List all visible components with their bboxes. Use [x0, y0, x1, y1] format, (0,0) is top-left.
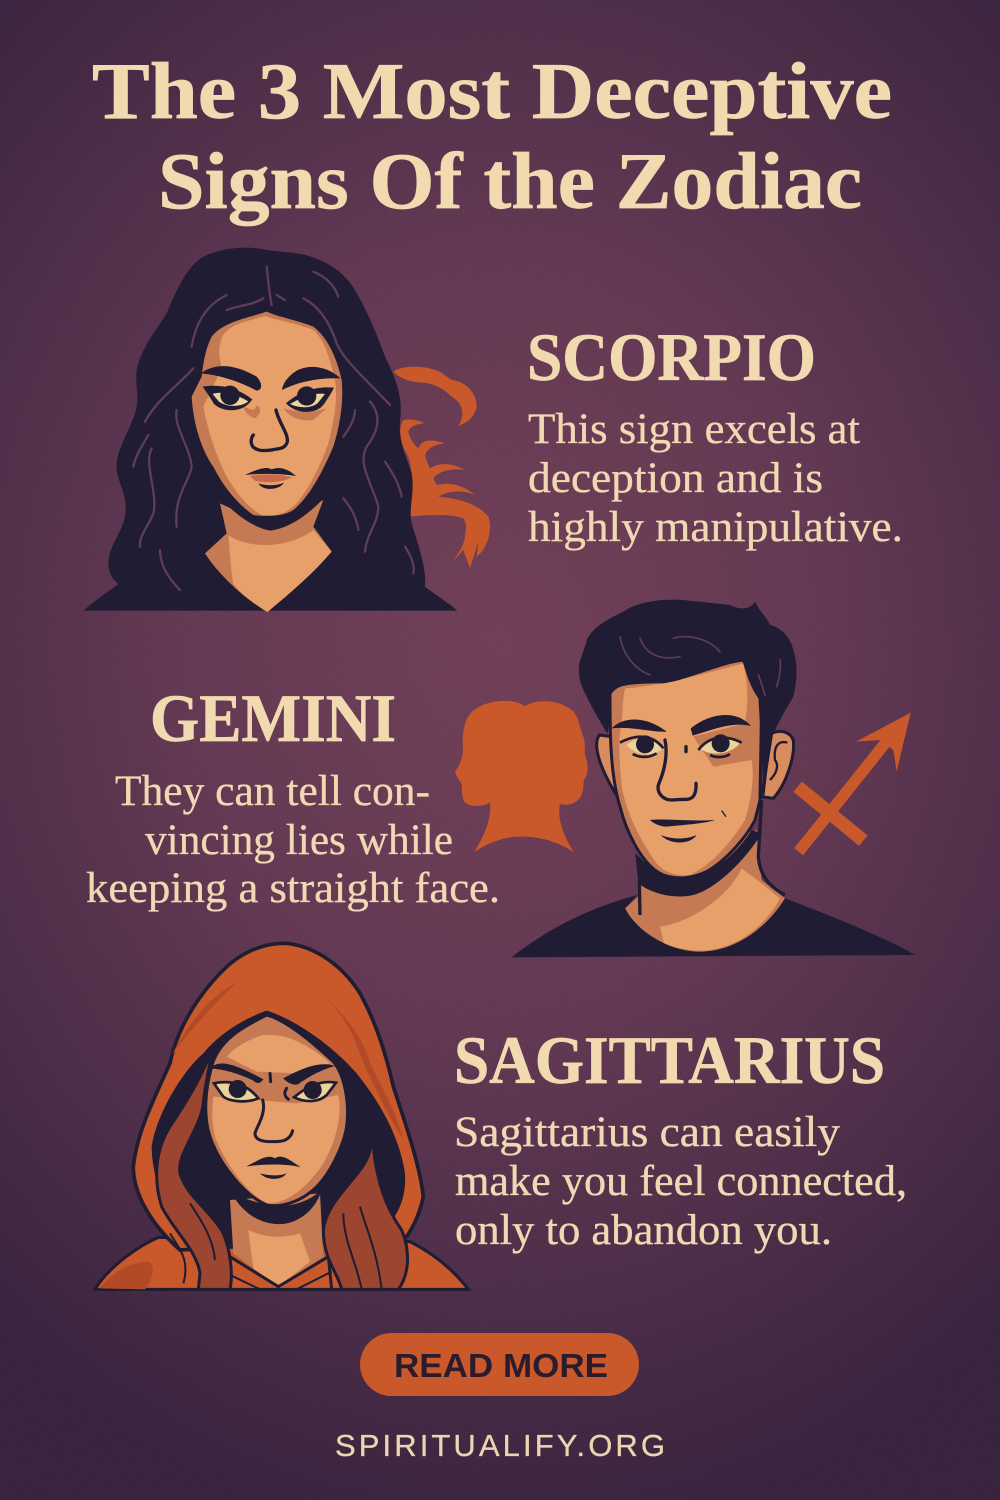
icon: scorpion silhouette: [393, 367, 490, 568]
text: Gemini description: keeping a straight face.: [86, 865, 500, 912]
text: Gemini description: vincing lies while: [145, 817, 453, 864]
eyes: [214, 1082, 258, 1101]
mouth: [246, 1157, 301, 1167]
text: Sagittarius description: [454, 1109, 907, 1254]
text: Sagittarius description: Sagittarius can easily: [454, 1109, 841, 1156]
eyes: [627, 738, 663, 754]
panel: Gemini: [86, 600, 915, 957]
text: Sagittarius description: make you feel connected,: [455, 1158, 907, 1205]
ears: [762, 731, 794, 798]
text: Sagittarius description: only to abandon you.: [455, 1207, 832, 1254]
nose: [255, 1073, 293, 1142]
eyebrows: [201, 366, 261, 391]
neck and chest: [205, 500, 332, 612]
mouth: [650, 820, 715, 827]
button: read more: [360, 1333, 639, 1396]
face shadow: [192, 312, 342, 516]
heading: GEMINI: GEMINI: [150, 680, 396, 756]
jaw shadow and neck line: [635, 830, 762, 897]
hair highlights: [133, 267, 414, 590]
collar: [223, 1257, 332, 1289]
text: Gemini description: [86, 768, 500, 912]
face: [610, 660, 762, 878]
nose: [251, 410, 287, 451]
heading: SAGITTARIUS: SAGITTARIUS: [454, 1022, 885, 1098]
panel: Sagittarius: [95, 943, 907, 1289]
button: read more: READ MORE: [394, 1347, 608, 1384]
text: Scorpio description: [528, 406, 903, 551]
hair and top: [83, 248, 457, 611]
mouth: [245, 468, 296, 476]
portrait: dark-haired man: [512, 600, 915, 957]
face light: [203, 316, 336, 515]
text: Scorpio description: This sign excels at: [528, 406, 860, 453]
heading: SCORPIO: SCORPIO: [527, 319, 816, 395]
chin shadow: [232, 1190, 322, 1224]
footer: website: SPIRITUALIFY.ORG: [335, 1428, 665, 1463]
shirt: [512, 895, 915, 957]
inner hood shadow: [152, 1011, 405, 1247]
nose: [658, 740, 696, 800]
icon: twin profile silhouette: [455, 701, 588, 852]
title: The 3 Most Deceptive: [92, 48, 892, 136]
text: Gemini description: They can tell con-: [115, 768, 430, 815]
hood: [133, 943, 423, 1250]
eyebrows: [210, 1063, 263, 1083]
portrait: dark-haired woman: [83, 248, 457, 612]
hair: [579, 600, 796, 800]
title: Signs Of the Zodiac: [158, 138, 862, 226]
neck and chest: [625, 830, 785, 952]
shoulders: [95, 1237, 468, 1289]
eyebrows: [612, 719, 667, 732]
text: Scorpio description: highly manipulative.: [528, 504, 903, 551]
text: Scorpio description: deception and is: [528, 455, 823, 502]
face: [206, 1015, 348, 1206]
icon: sagittarius arrow: [798, 713, 911, 852]
neck: [230, 1193, 323, 1287]
hair: [157, 1050, 408, 1289]
eyes: [203, 386, 252, 410]
panel: Scorpio: [83, 248, 903, 612]
portrait: woman in orange hood: [95, 943, 468, 1289]
title: [92, 48, 892, 226]
chin shadow: [217, 487, 325, 531]
